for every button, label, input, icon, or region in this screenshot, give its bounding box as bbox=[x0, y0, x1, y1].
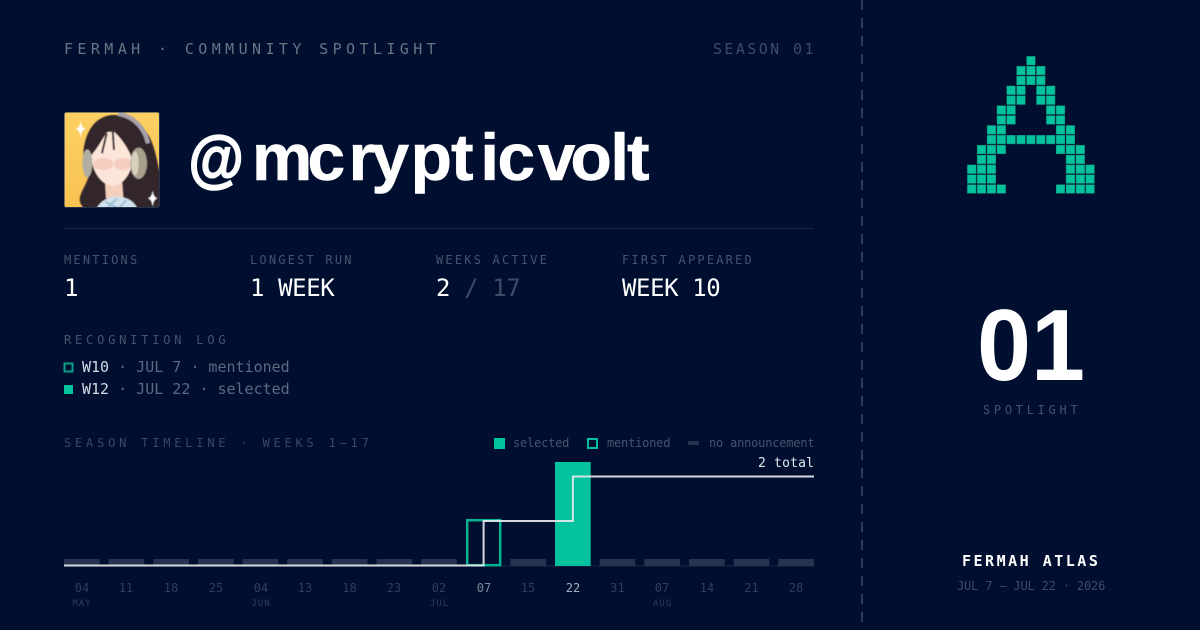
timeline axis labels: 07 bbox=[655, 581, 669, 595]
timeline axis labels: 31 bbox=[610, 581, 625, 595]
timeline axis labels: 07 bbox=[477, 581, 491, 595]
header: season: SEASON 01 bbox=[713, 40, 816, 58]
timeline axis labels: 14 bbox=[700, 581, 714, 595]
recognition log: W10 · JUL 7 · mentioned bbox=[82, 358, 290, 376]
legend: selected bbox=[513, 436, 569, 450]
avatar bbox=[64, 112, 162, 210]
timeline axis labels: 04 bbox=[75, 581, 89, 595]
legend: no announcement bbox=[709, 436, 814, 450]
timeline axis labels: 15 bbox=[521, 581, 535, 595]
timeline axis labels: MAY bbox=[72, 599, 92, 609]
recognition log: W12 · JUL 22 · selected bbox=[82, 380, 290, 398]
timeline axis labels: 11 bbox=[119, 581, 133, 595]
stat: mentions bbox=[64, 253, 139, 302]
timeline axis labels: 02 bbox=[432, 581, 446, 595]
recognition log bbox=[64, 333, 290, 398]
timeline heading: SEASON TIMELINE · WEEKS 1–17 bbox=[64, 436, 373, 450]
timeline axis labels bbox=[72, 581, 803, 609]
stat: weeks active: WEEKS ACTIVE bbox=[436, 253, 549, 267]
handle heading: @ bbox=[188, 123, 244, 194]
timeline axis labels: 22 bbox=[566, 581, 580, 595]
timeline axis labels: 04 bbox=[254, 581, 268, 595]
timeline axis labels: 25 bbox=[209, 581, 223, 595]
mentioned bar bbox=[467, 520, 500, 565]
timeline chart bbox=[64, 456, 814, 566]
cumulative line bbox=[64, 476, 814, 566]
handle heading: mcrypticvolt bbox=[252, 121, 650, 195]
footer brand: FERMAH ATLAS bbox=[962, 552, 1100, 570]
footer dates: JUL 7 — JUL 22 · 2026 bbox=[957, 579, 1105, 593]
icon: pixel letter A bbox=[967, 56, 1094, 193]
legend: mentioned bbox=[607, 436, 670, 450]
stat: longest run bbox=[250, 253, 354, 302]
stat: mentions: 1 bbox=[64, 274, 78, 302]
header: community spotlight: FERMAH · COMMUNITY SPOTLIGHT bbox=[64, 40, 440, 58]
timeline axis labels: AUG bbox=[653, 599, 672, 609]
timeline axis labels: JUN bbox=[251, 599, 271, 609]
timeline axis labels: JUL bbox=[430, 599, 449, 609]
total label: 2 total bbox=[758, 456, 814, 471]
timeline axis labels: 18 bbox=[164, 581, 178, 595]
stat: first appeared bbox=[622, 253, 754, 302]
rank number: 01 bbox=[977, 290, 1085, 402]
legend bbox=[494, 436, 814, 450]
timeline axis labels: 23 bbox=[387, 581, 401, 595]
selected bar bbox=[555, 462, 591, 566]
timeline axis labels: 28 bbox=[789, 581, 803, 595]
stat: longest run: 1 WEEK bbox=[250, 274, 335, 302]
timeline axis labels: 13 bbox=[298, 581, 312, 595]
stat: first appeared: FIRST APPEARED bbox=[622, 253, 754, 267]
recognition log: RECOGNITION LOG bbox=[64, 333, 229, 347]
timeline axis labels: 21 bbox=[744, 581, 759, 595]
rank caption: SPOTLIGHT bbox=[983, 403, 1081, 417]
stat: longest run: LONGEST RUN bbox=[250, 253, 354, 267]
timeline axis labels: 18 bbox=[342, 581, 357, 595]
stat: weeks active bbox=[436, 253, 549, 302]
stat: weeks active: 2 / 17 bbox=[436, 274, 520, 302]
stat: first appeared: WEEK 10 bbox=[622, 274, 720, 302]
stat: mentions: MENTIONS bbox=[64, 253, 139, 267]
